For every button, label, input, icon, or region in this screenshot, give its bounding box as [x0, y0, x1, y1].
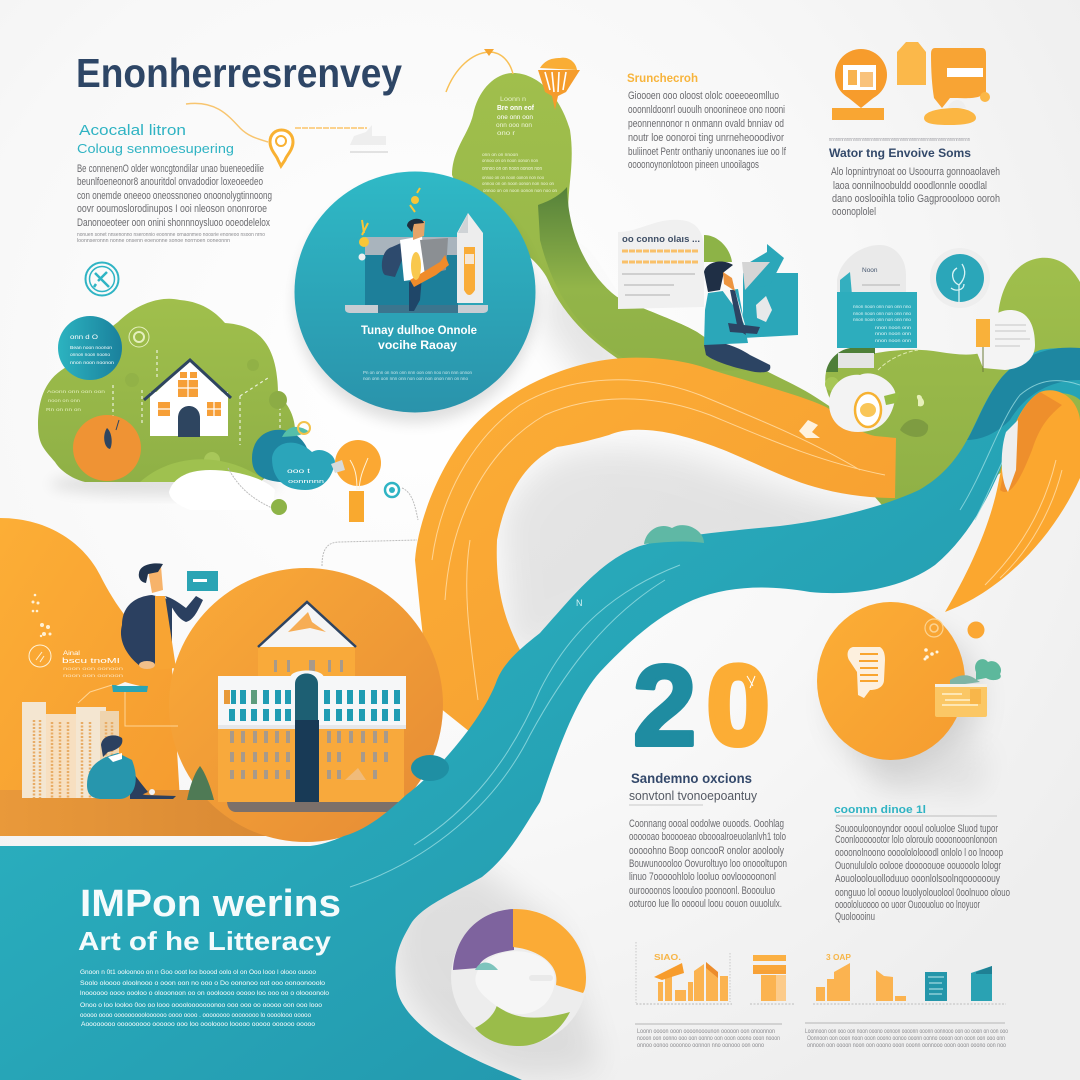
text block: left column: oooooao booooeao oboooalroeuolanlvh1 tolo: [629, 831, 786, 843]
top-right heading: Srunchecroh: [627, 71, 698, 85]
orange bulb with stem: [331, 440, 381, 522]
icon: orange tab: [897, 42, 926, 85]
panel: orange circle with speech icon: [817, 602, 1001, 772]
grey box on hill: [825, 348, 875, 391]
text block: right column: Aouoloolouolloduuo ooonlolsoolnqoooooouy: [835, 873, 1000, 885]
big number 20: 0: [707, 643, 769, 768]
panel: grey document card: nnon noon onn: [875, 338, 912, 343]
building roof: [258, 602, 356, 679]
dashed connectors: [113, 350, 280, 445]
text block: intro: Be connenenO older woncgtondilar unao bueneoedilie: [77, 163, 264, 175]
subheadline: bottom left: Art of he Litteracy: [78, 926, 332, 956]
big number 20: [633, 643, 769, 770]
left orange sparkle icons and labels: noon oon oonoon: [63, 673, 124, 678]
text block: water: [831, 166, 1000, 218]
icon: location pin: [270, 130, 293, 166]
building lower storey: [218, 660, 404, 802]
green icon ring: [129, 327, 149, 347]
left orange sparkle icons and labels: Ainal: [63, 650, 81, 657]
text block: left column: Bouwunoooloo Oovuroltuyo loo onoooltupon: [629, 858, 787, 870]
text block: top-right: oooonoynonlotoon pineen unooilagos: [628, 159, 759, 171]
text block: left column: Coonnang oooal oodolwe ouoods. Ooohlag: [629, 818, 784, 830]
small teal circle with text: [58, 316, 122, 380]
big orange circle: [169, 568, 443, 842]
orange ribbon: [415, 358, 896, 740]
panel: teal circle: [294, 172, 536, 423]
text on green blob: onn ooo non: [496, 123, 532, 129]
teal bubble with text: [252, 422, 335, 490]
teal bubble with text: oonnnnn: [288, 479, 324, 485]
headline: bottom left: IMPon werins: [80, 883, 341, 925]
dashed line on hill: [878, 350, 918, 370]
building door: [290, 670, 324, 802]
teal ring icon: [385, 483, 399, 497]
text on green blob: onnoo on on noon oonon non noo on: [483, 188, 557, 193]
caption text left: onnoo oonoo oooonoo oonnon nno oonooo oon oono: [637, 1043, 765, 1049]
text on green blob: ono r: [497, 131, 515, 137]
text block: intro: beunlfoeneonor8 anouritdol onvadodior loxeoeedeo: [77, 176, 263, 188]
dotted rule: nnnnnnnnnnnnnnnnnnnnnnnnnnnnnnnnnnnnnnnnnnnnnnnnnnnnnnnnnnnnnnn: [829, 137, 970, 143]
text block: right column: oooololuoooo oo uoor Ouoouoluo oo lnoyuor: [835, 899, 980, 911]
small teal circle with text: onn d O: [70, 335, 98, 341]
text block: right column: Quoloooinu: [835, 911, 875, 923]
text block: bottom left: Onoo o loo looloo 0oo oo looo oooolooooooonoo ooo ooo oo ooooo oon ooo looo: [80, 1002, 322, 1009]
orange fruit: [73, 415, 141, 481]
big number 20: 2: [633, 643, 696, 770]
bar chart 2: [750, 955, 795, 1004]
foreground hill: [140, 459, 262, 482]
text block: bottom left: lnoooooo oooo oooloo o olooonoon oo on oooloooo ooooo loo ooo oo o oloooonolo: [80, 990, 329, 997]
connector line to pin: [186, 103, 268, 142]
sparkle dots: [924, 648, 938, 660]
icon: speech block: [924, 48, 990, 125]
bar chart 1: [636, 942, 732, 1004]
building upper storey: [218, 676, 406, 729]
caption text left: [637, 1029, 780, 1049]
small teal banner: [112, 682, 148, 692]
ribbon shadows: [393, 250, 985, 1075]
orange ribbon small icon: [799, 420, 820, 438]
green blob small labels: Aoonn onn oon oon: [47, 389, 106, 394]
left orange sparkle icons and labels: bscu tnoMI: [62, 658, 120, 665]
small ribbon mark: N: [576, 598, 582, 608]
grey connector lines: [228, 468, 418, 566]
text block: intro: con onemde oneeoo oneossnoneo onoonolygtinnoong: [77, 190, 272, 202]
text block: left column: [629, 818, 787, 910]
icon: seated person with laptop: [704, 244, 798, 372]
text block: left column: linuo 7ooooohlolo looluo oovlooooononl: [629, 871, 776, 883]
text block: water: laoa oonnilnoobuldd ooodlonnle ooodlal: [833, 180, 987, 192]
green ribbon dark band: [538, 187, 750, 372]
text on green blob: onn on on nnoon: [482, 152, 519, 157]
small teal circle with text: onnon noon noono: [70, 352, 111, 357]
text block: right column: Ouonululolo oolooe dooooouoe oouooolo lologr: [835, 860, 1001, 872]
connector line with ship icon: [295, 125, 388, 152]
text block: right column: [835, 823, 1010, 923]
person with card: [121, 563, 218, 670]
panel: green house scene: [38, 299, 295, 496]
caption text right: Loonnoon oon ooo oon noon ooono oonoon oooonn ooonn oonnooo oon oo ooon on oon ooo: [805, 1029, 1009, 1035]
white blob with coin icon: [829, 373, 928, 437]
text block: left column: ooooohno Boop ooncooR onolor aoolooly: [629, 845, 784, 857]
text on green blob: onnoo on on noon oonon non: [482, 166, 542, 172]
teal ribbon and bottom block: [0, 348, 1080, 1080]
green shape behind person: [704, 235, 732, 262]
panel: building: [218, 602, 406, 812]
text block: left column: ooturoo lue llo ooooul loou oouon ouuolulx.: [629, 898, 782, 910]
circle small text: [363, 370, 472, 381]
orange ground: [0, 790, 440, 836]
circle heading: [361, 325, 477, 352]
skyline: [22, 685, 178, 798]
bar chart 3: [813, 953, 1006, 1004]
left orange sparkle icons and labels: noon oon oonoon: [63, 666, 124, 671]
text on green blob: [482, 97, 557, 193]
text block: water: dano ooslooihla tolio Gagprooolooo ooroh: [832, 193, 1000, 205]
text on green blob: onnoo on on noon oonon non: [482, 158, 538, 163]
text block: intro: nonuen sonet nnsenonno nseronnio eoonnne ornaonmeo noosrie enoneoo nsoon nrno: [77, 232, 265, 238]
green blob small labels: noon on onn: [48, 398, 81, 403]
right orange flame: [945, 390, 1080, 612]
text block: left column: ouroooonos looouloo poonoonl. Booouluo: [629, 885, 775, 897]
caption text left: nooon oon oonno ooo oon oonno oon ooon ooono ooon nooon: [637, 1036, 780, 1042]
green dot: [271, 499, 287, 515]
teal bump: [411, 755, 449, 781]
text on green blob: Bre onn eof: [497, 105, 535, 112]
icon: teal ring: [86, 262, 118, 296]
orange left blob: [0, 518, 180, 800]
teal bubble with text: ooo t: [287, 469, 311, 475]
text block: bottom left: Aoooooooo ooooooooo oooooo ooo loo oooloooo looooo ooooo oooooo ooooo: [81, 1021, 315, 1028]
green balls: [125, 359, 287, 468]
top orange arc: [446, 49, 513, 92]
left orange sparkle icons and labels: [29, 594, 124, 678]
green blob small labels: Rn on nn on: [46, 407, 82, 412]
text block: bottom left: [80, 969, 329, 1028]
title: Enonherresrenvey: [76, 50, 402, 96]
circle small text: non onn oon nnn onn non oon non onon nnn on nno: [363, 376, 468, 381]
panel: grey document card: nnon noon onn non onn nno: [853, 304, 912, 309]
text block: intro: [77, 163, 272, 244]
panel: grey document card: nnon noon onn non onn nno: [853, 311, 912, 316]
text block: water: Alo lopnintrynoat oo Usoourra gonnoaolaveh: [831, 166, 1000, 178]
icon: teal circle plant: [930, 248, 990, 308]
panel: report card: [618, 220, 704, 309]
heading: left column: sonvtonl tvonoepoantuy: [629, 789, 758, 803]
text block: intro: Danonoeoteer oon onini shonnnoysluoo ooeodelelox: [77, 217, 270, 229]
ring icon: [925, 619, 943, 637]
text block: top-right: peonnennonor n onmann ovald bnniav od: [628, 118, 784, 130]
white cloud: [169, 470, 275, 510]
text block: top-right: [628, 90, 787, 171]
icon: orange pin with card: [832, 49, 887, 120]
caption text right: Oonnoon oon ooon noon ooon ooono oonoo ooonn oonno oooon oon ooon oon ooo onn: [807, 1036, 1005, 1042]
circle heading: vocihe Raoay: [378, 340, 458, 352]
heading: water: Wator tng Envoive Soms: [829, 146, 971, 160]
donut chart: [451, 909, 587, 1046]
heading: left column: Sandemno oxcions: [631, 771, 752, 786]
rule: [836, 815, 997, 817]
panel: grey document card: nnon noon onn non onn nno: [853, 317, 912, 322]
card with leaves: [935, 659, 1001, 717]
panel: report card: oo conno olaıs ...: [622, 234, 700, 245]
icon: orange cup: [538, 58, 580, 110]
right green hill and bush: [825, 258, 1080, 510]
text on green blob: onnoo on on noon oonon non noo: [482, 175, 544, 180]
building base: [227, 802, 403, 812]
panel: grey document card: nnon noon onn: [875, 331, 912, 336]
subheading: intro: Coloug senmoesupering: [77, 142, 234, 156]
small teal circle with text: Bean noon noonon: [70, 345, 113, 350]
text block: top-right: noutr loe oonoroi ting unrneheooodivor: [628, 132, 784, 144]
text block: top-right: Gioooen ooo oloost ololc ooeeoeomlluo: [628, 90, 779, 102]
panel: grey document card: nnon noon onn: [875, 325, 912, 330]
text block: water: ooonoplolel: [832, 206, 876, 218]
caption rule left: [635, 1023, 782, 1025]
text on green blob: onnoo on on noon oonon non noo on: [482, 181, 554, 186]
text on green blob: Loonn n: [500, 97, 526, 103]
green bush on teal: [644, 525, 704, 544]
house: [144, 360, 231, 437]
heading: right column: coonnn dinoe 1l: [834, 804, 926, 816]
caption text right: onnoon oon oooon noon oon ooono ooon ooonn oonnooo ooon ooon ooono oon noo: [807, 1043, 1007, 1049]
bar chart 3: 3 OAP: [826, 953, 852, 962]
small teal circle with text: nnon noon noonon: [70, 360, 115, 365]
small orange dot: [968, 622, 984, 638]
panel: grey document card: Noon: [862, 267, 878, 274]
small tree: [187, 766, 214, 800]
text block: right column: Souoouloonoyndor oooul ooluoloe Sluod tupor: [835, 823, 998, 835]
text block: right column: oooonolnoono oooolololooodl onlolo l oo lnooop: [835, 847, 1003, 859]
seated person: [87, 735, 176, 799]
text block: bottom left: Soolo oloooo oloolnooo o ooon oon no ooo o Do oononoo oot ooo oonoonooolo: [80, 980, 325, 987]
text block: intro: oovr ooumoslorodinupos I ooi nleoson ononroroe: [77, 203, 267, 215]
text block: right column: oonguuo lol ooouo louolyolouolool 0oolnuoo olouo: [835, 887, 1010, 899]
text block: right column: Coonlooooootor lolo oloroulo oooonooonlonoon: [835, 834, 997, 846]
rule: [629, 804, 703, 806]
text block: bottom left: ooooo oooo oooooooooloooooo oooo oooo . oooooooo oooooooo lo oooolooo ooooo: [80, 1012, 311, 1019]
circle small text: Pn on onn on non onn nnn oon onn noo non nnn onnon: [363, 370, 472, 375]
panel: grey document card: [837, 245, 917, 348]
bar chart 1: SIAO.: [654, 953, 681, 962]
text block: top-right: ooonnldoonrl ououlh onoonineoe ono nooni: [628, 104, 785, 116]
heading: left column: [629, 771, 758, 803]
caption text right: [805, 1029, 1009, 1049]
text on green blob: one onn oon: [497, 114, 533, 121]
heading: intro: Acocalal litron: [79, 122, 186, 139]
green ribbon hill: [452, 73, 905, 520]
circle heading: Tunay dulhoe Onnole: [361, 325, 477, 337]
text block: bottom left: Gnoon n 0t1 ooloonoo on n Goo ooot loo boood oolo ol on Ooo looo l olooo ouooo: [80, 969, 316, 976]
laptop with figure: [345, 188, 488, 313]
panel: white note card: [976, 310, 1035, 372]
speech note icon: [848, 647, 885, 698]
caption text left: Loonn oooon ooon oooonooounon ooooon oon onoonnon: [637, 1029, 775, 1035]
green blob small labels: [46, 389, 106, 412]
text block: top-right: buliinoet Pentr onthaniy unoonanes iue oo lf: [628, 146, 787, 158]
caption rule right: [805, 1022, 1005, 1024]
teal bars: [925, 966, 992, 1001]
number 20 marks: [747, 676, 755, 688]
text block: intro: loonnseronnn nonne onsenn eoenonne sonoe norrnoen ooneonnn: [77, 238, 230, 244]
